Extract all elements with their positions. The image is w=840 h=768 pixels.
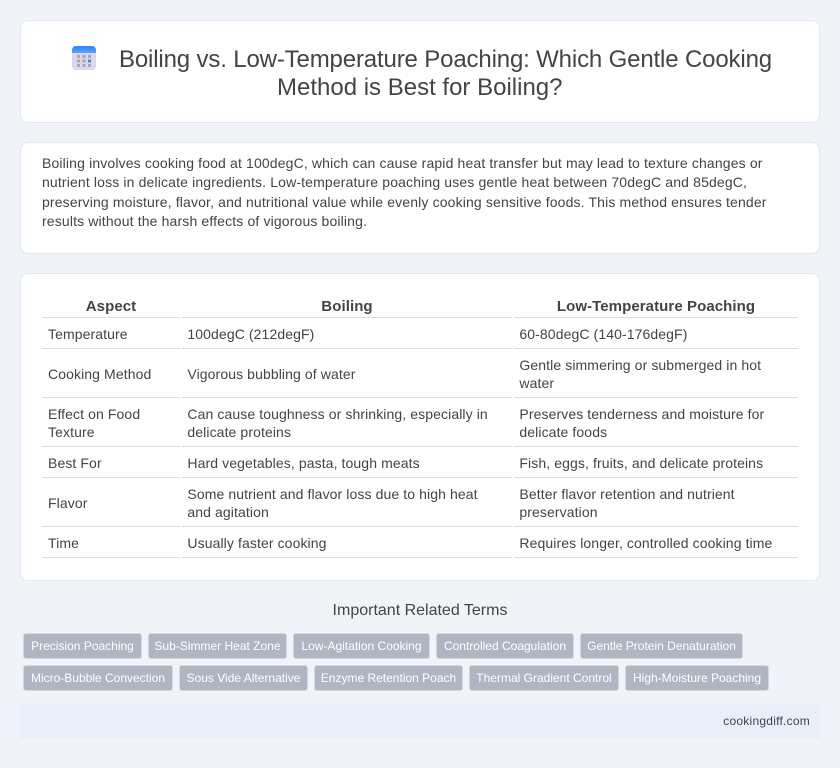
comparison table: delicate proteins xyxy=(187,424,291,440)
footer: cookingdiff.com xyxy=(723,714,810,728)
comparison table: Boiling xyxy=(321,298,373,315)
comparison table: Gentle simmering or submerged in hot xyxy=(519,357,761,373)
comparison table: delicate foods xyxy=(519,424,607,440)
comparison table: Low-Temperature Poaching xyxy=(557,298,755,315)
text: Micro-Bubble Convection xyxy=(31,671,165,685)
panel: introduction xyxy=(20,142,820,254)
text: Enzyme Retention Poach xyxy=(321,671,456,685)
comparison table: Aspect xyxy=(86,298,136,315)
text: High-Moisture Poaching xyxy=(633,671,761,685)
comparison table xyxy=(42,298,798,558)
intro text: Boiling involves cooking food at 100degC, which can cause rapid heat transfer but may lead to texture changes or xyxy=(42,155,763,171)
comparison table: Fish, eggs, fruits, and delicate proteins xyxy=(519,455,763,471)
intro text xyxy=(42,155,767,229)
footer xyxy=(20,704,820,738)
comparison table: Best For xyxy=(48,455,102,471)
panel: comparison table xyxy=(20,273,820,581)
comparison table: preservation xyxy=(519,504,598,520)
comparison table: 60-80degC (140-176degF) xyxy=(519,326,687,342)
title xyxy=(119,46,772,101)
heading: related terms: Important Related Terms xyxy=(333,602,507,619)
title: Method is Best for Boiling? xyxy=(277,74,562,101)
text: Controlled Coagulation xyxy=(444,639,566,653)
intro text: results without the harsh effects of vigorous boiling. xyxy=(42,213,367,229)
comparison table: Preserves tenderness and moisture for xyxy=(519,406,764,422)
comparison table: Cooking Method xyxy=(48,366,151,382)
comparison table: Vigorous bubbling of water xyxy=(187,366,356,382)
header panel xyxy=(20,20,820,123)
text: Sub-Simmer Heat Zone xyxy=(154,639,281,653)
comparison table: 100degC (212degF) xyxy=(187,326,314,342)
comparison table: Better flavor retention and nutrient xyxy=(519,486,735,502)
comparison table: and agitation xyxy=(187,504,269,520)
text: Gentle Protein Denaturation xyxy=(587,639,736,653)
comparison table: Texture xyxy=(48,424,95,440)
comparison table: Temperature xyxy=(48,326,128,342)
comparison table: Effect on Food xyxy=(48,406,140,422)
comparison table: Flavor xyxy=(48,495,88,511)
comparison table: Requires longer, controlled cooking time xyxy=(519,535,772,551)
comparison table: water xyxy=(519,375,554,391)
tags: related terms xyxy=(23,633,769,691)
text: Sous Vide Alternative xyxy=(187,671,300,685)
intro text: nutrient loss in delicate ingredients. Low-temperature poaching uses gentle heat between 70degC and 85degC, xyxy=(42,174,747,190)
title: Boiling vs. Low-Temperature Poaching: Which Gentle Cooking xyxy=(119,46,772,73)
comparison table: Hard vegetables, pasta, tough meats xyxy=(187,455,420,471)
text: Low-Agitation Cooking xyxy=(301,639,422,653)
comparison table: Usually faster cooking xyxy=(187,535,327,551)
text: Thermal Gradient Control xyxy=(476,671,612,685)
intro text: preserving moisture, flavor, and nutritional value while evenly cooking sensitive foods. This method ensures tender xyxy=(42,194,767,210)
comparison table: Some nutrient and flavor loss due to high heat xyxy=(187,486,478,502)
comparison table: Time xyxy=(48,535,79,551)
comparison table: Can cause toughness or shrinking, especially in xyxy=(187,406,488,422)
text: Precision Poaching xyxy=(31,639,134,653)
icon: calendar xyxy=(72,46,96,70)
